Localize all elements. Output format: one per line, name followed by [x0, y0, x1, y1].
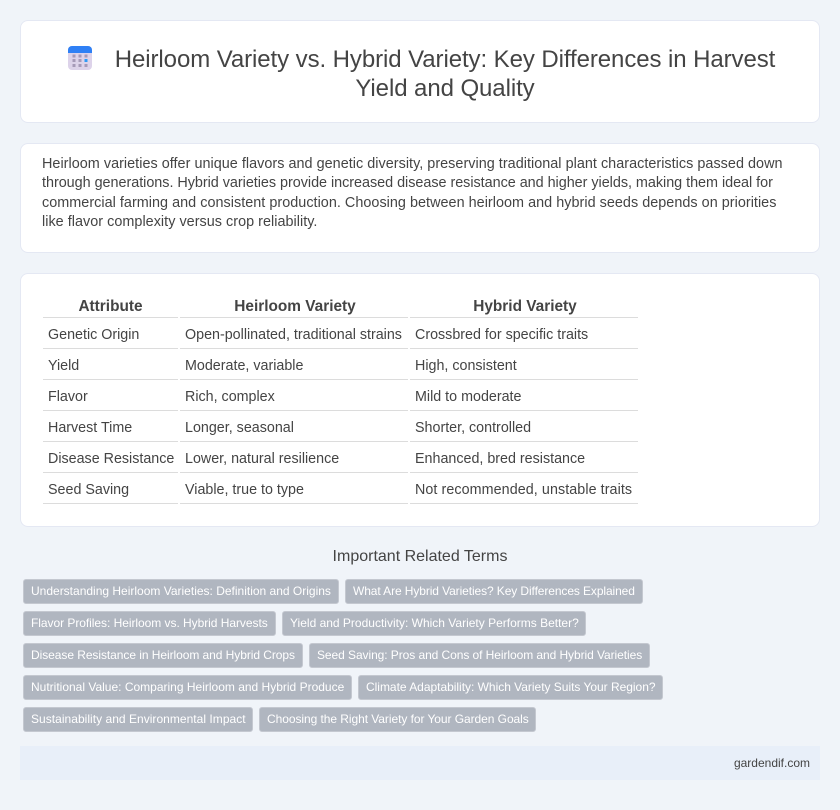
- tag: Choosing the Right Variety for Your Garden Goals: [267, 712, 529, 726]
- tag: Disease Resistance in Heirloom and Hybrid Crops: [31, 648, 295, 662]
- tag: [309, 643, 650, 668]
- tag: [23, 643, 303, 668]
- tag: [259, 707, 536, 732]
- tag: [345, 579, 643, 604]
- table row: genetic origin: Open-pollinated, traditional strains: [185, 327, 402, 343]
- table row: yield: Yield: [48, 358, 79, 374]
- table row: disease resistance: Disease Resistance: [48, 451, 174, 467]
- tag: [358, 675, 663, 700]
- heading: important related terms: Important Related Terms: [333, 548, 507, 565]
- tag: Seed Saving: Pros and Cons of Heirloom and Hybrid Varieties: [317, 648, 642, 662]
- table row: harvest time: Longer, seasonal: [185, 420, 294, 436]
- text block: introduction: Heirloom varieties offer unique flavors and genetic diversity, preserving traditional plant characteristics passed down: [42, 156, 783, 172]
- footer bar: [20, 746, 820, 780]
- text block: introduction: like flavor complexity versus crop reliability.: [42, 214, 317, 230]
- footer: site name: gardendif.com: [734, 756, 810, 770]
- tag: [282, 611, 586, 636]
- table row: seed saving: Seed Saving: [48, 482, 129, 498]
- icon: calendar: [68, 46, 92, 70]
- tag: [23, 579, 339, 604]
- table row: flavor: [48, 389, 521, 405]
- text block: introduction: [42, 156, 783, 230]
- table row: genetic origin: [48, 327, 588, 343]
- table row: yield: [48, 358, 517, 374]
- tag list: related terms: [23, 579, 663, 732]
- table row: seed saving: Not recommended, unstable traits: [415, 482, 632, 498]
- tag: Understanding Heirloom Varieties: Definition and Origins: [31, 584, 331, 598]
- tag: Sustainability and Environmental Impact: [31, 712, 246, 726]
- tag: Flavor Profiles: Heirloom vs. Hybrid Harvests: [31, 616, 268, 630]
- table row: harvest time: Harvest Time: [48, 420, 132, 436]
- table row: yield: High, consistent: [415, 358, 517, 374]
- text block: introduction: through generations. Hybrid varieties provide increased disease resistance and higher yields, making them ideal for: [42, 175, 773, 191]
- table header: [78, 298, 577, 315]
- tag: [23, 611, 276, 636]
- table row: genetic origin: Crossbred for specific traits: [415, 327, 588, 343]
- table row: seed saving: [48, 482, 632, 498]
- table header: Heirloom Variety: [234, 298, 356, 315]
- text block: introduction: commercial farming and consistent production. Choosing between heirloom and hybrid seeds depends on priorities: [42, 194, 776, 210]
- tag: Climate Adaptability: Which Variety Suits Your Region?: [366, 680, 656, 694]
- title: Yield and Quality: [355, 75, 535, 102]
- table row: disease resistance: Lower, natural resilience: [185, 451, 339, 467]
- tag: What Are Hybrid Varieties? Key Differences Explained: [353, 584, 635, 598]
- title: Heirloom Variety vs. Hybrid Variety: Key Differences in Harvest: [115, 46, 775, 73]
- table row: harvest time: Shorter, controlled: [415, 420, 531, 436]
- table header: Hybrid Variety: [473, 298, 577, 315]
- table row: genetic origin: Genetic Origin: [48, 327, 139, 343]
- table row: yield: Moderate, variable: [185, 358, 303, 374]
- table row: disease resistance: [48, 451, 585, 467]
- table row: flavor: Mild to moderate: [415, 389, 521, 405]
- panel: introduction: [20, 143, 820, 253]
- panel: comparison table: [20, 273, 820, 527]
- table row: disease resistance: Enhanced, bred resistance: [415, 451, 585, 467]
- tag: [23, 707, 253, 732]
- table row: seed saving: Viable, true to type: [185, 482, 304, 498]
- table row: harvest time: [48, 420, 531, 436]
- tag: Nutritional Value: Comparing Heirloom and Hybrid Produce: [31, 680, 344, 694]
- table header: Attribute: [78, 298, 143, 315]
- tag: [23, 675, 352, 700]
- table row: flavor: Flavor: [48, 389, 88, 405]
- title: [115, 46, 776, 102]
- panel: title card: [20, 20, 820, 123]
- table row: flavor: Rich, complex: [185, 389, 275, 405]
- tag: Yield and Productivity: Which Variety Performs Better?: [290, 616, 579, 630]
